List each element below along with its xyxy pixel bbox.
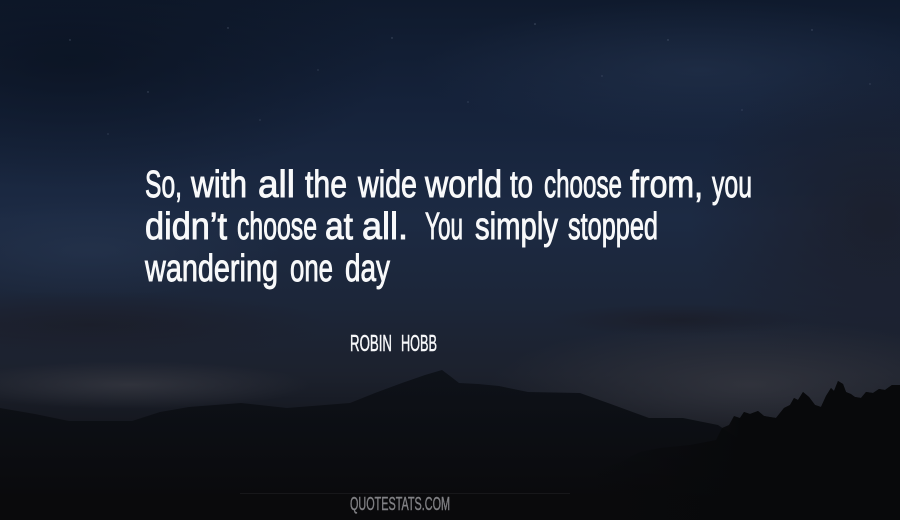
quote text: wandering [144,248,278,290]
author name: ROBIN [350,330,392,356]
quote text: the [305,164,347,206]
site watermark: QUOTESTATS.COM [350,494,450,514]
quote text: didn’t [145,206,227,248]
quote text: world [424,164,502,206]
quote text: all [258,164,295,206]
quote text: with [190,164,247,206]
quote text: all. [362,206,408,248]
quote text: stopped [568,206,658,248]
quote text: wide [357,164,417,206]
quote text: day [345,248,390,290]
author name: HOBB [401,330,437,356]
quote text: from, [630,164,703,206]
quote text: you [712,164,752,206]
faint divider above site name [240,493,570,494]
quote text: simply [475,206,558,248]
quote text: at [325,206,353,248]
quote text: So, [145,164,182,206]
stars [69,23,871,135]
distant mountain ridge [0,370,740,520]
quote text: choose [544,164,622,206]
quote text: to [510,164,533,206]
quote text [144,164,752,290]
foreground tree line [590,381,900,520]
quote text: choose [237,206,317,248]
quote text: You [425,206,463,248]
quote text: one [290,248,333,290]
